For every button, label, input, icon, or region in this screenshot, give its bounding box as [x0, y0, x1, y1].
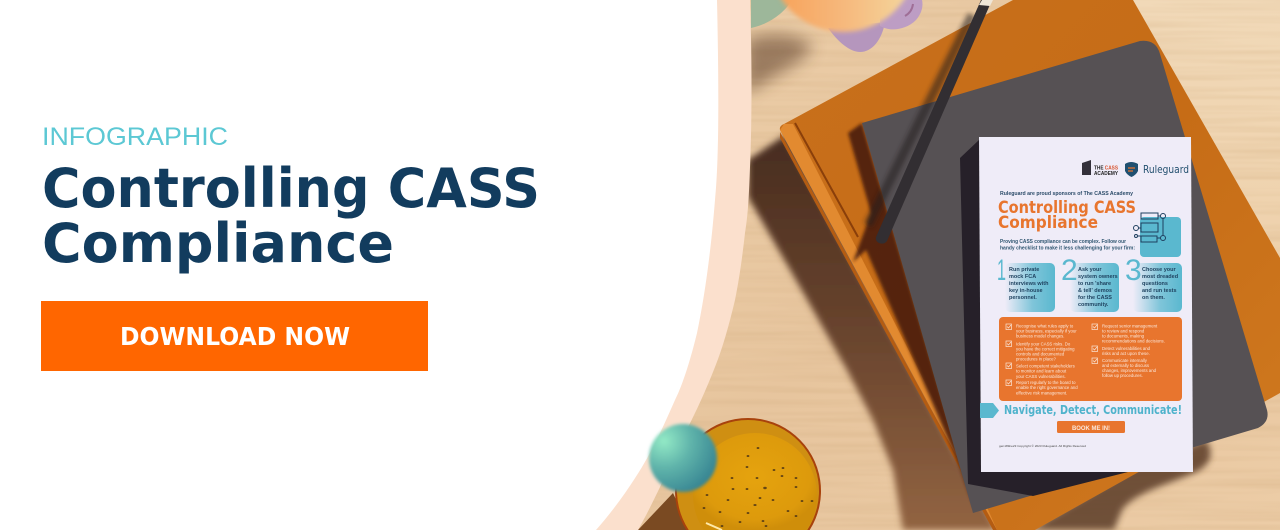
logo: Ruleguard	[1125, 162, 1189, 177]
sponsor line: Ruleguard are proud sponsors of The CASS Academy	[1000, 191, 1134, 197]
leaflet mockup	[979, 137, 1193, 472]
logo: The CASS Academy: THE CASS	[1094, 166, 1118, 172]
leaflet heading	[998, 198, 1136, 233]
checklist text: your CASS vulnerabilities.	[1016, 374, 1066, 379]
step 2	[1061, 254, 1119, 312]
intro text: Proving CASS compliance can be complex. Follow our	[1000, 239, 1126, 245]
icon: process diagram	[1134, 213, 1181, 257]
step 2: for the CASS	[1078, 295, 1112, 301]
photo: desk scene	[590, 0, 1280, 530]
checklist text: controls and documented	[1016, 352, 1065, 356]
pencil	[868, 0, 993, 244]
checklist text: procedures in place?	[1016, 356, 1057, 362]
step 3	[1125, 254, 1182, 312]
step 2: system owners	[1078, 274, 1118, 280]
leaflet heading: Compliance	[998, 213, 1098, 233]
step 1: interviews with	[1009, 281, 1049, 287]
intro text	[1000, 239, 1135, 252]
checklist text: your business, especially if your	[1016, 328, 1077, 334]
peach curved band	[0, 0, 752, 530]
step 3: questions	[1142, 281, 1168, 287]
step 1	[997, 254, 1055, 312]
step 1: 1	[997, 254, 1006, 287]
checklist text: recommendations and decisions.	[1102, 338, 1165, 344]
step 1: mock FCA	[1009, 274, 1036, 280]
eyebrow label: INFOGRAPHIC	[42, 123, 228, 151]
checklist text: enable the right governance and	[1016, 385, 1078, 390]
checklist text: to review and respond	[1102, 328, 1145, 334]
leaf	[751, 0, 792, 28]
checklist text: follow up procedures.	[1102, 373, 1143, 378]
step 2: Ask your	[1078, 267, 1102, 273]
step 2: 2	[1061, 254, 1078, 287]
checklist text: Detect vulnerabilities and	[1102, 346, 1151, 351]
checklist text: business model changes.	[1016, 334, 1064, 338]
book shadow under sheet	[960, 140, 1193, 496]
title	[42, 157, 540, 275]
checklist text: to documents, making	[1102, 334, 1145, 338]
checklist text: to monitor and learn about	[1016, 368, 1067, 374]
logo: The CASS Academy: ACADEMY	[1094, 171, 1118, 177]
logo: The CASS Academy	[1082, 160, 1118, 177]
step 2: community.	[1078, 302, 1109, 308]
step 3: on them.	[1142, 295, 1165, 301]
checklist text: Recognise what rules apply to	[1016, 324, 1074, 328]
checklist text: Identify your CASS risks. Do	[1016, 342, 1071, 346]
orange notebook	[780, 0, 1280, 530]
wooden table	[590, 0, 1280, 530]
slogan: Navigate, Detect, Communicate!	[1004, 402, 1182, 417]
checklist text: changes, improvements and	[1102, 368, 1157, 373]
checklist text: Report regularly to the board to	[1016, 380, 1076, 385]
checklist text: and externally to discuss	[1102, 363, 1149, 368]
step 3: most dreaded	[1142, 274, 1178, 280]
step 1: Run private	[1009, 267, 1039, 273]
flower petals	[828, 0, 922, 52]
checklist text: you have the correct mitigating	[1016, 346, 1075, 352]
grey notebook	[862, 41, 1268, 513]
step 1: personnel.	[1009, 295, 1037, 301]
leaflet button: BOOK ME IN!	[1072, 425, 1110, 432]
checklist text: Select competent stakeholders	[1016, 364, 1075, 368]
teal sphere	[649, 424, 717, 492]
white panel	[0, 0, 718, 530]
download button	[41, 301, 428, 371]
checklist text: effective risk management.	[1016, 390, 1067, 396]
checklist text	[1016, 324, 1165, 396]
table shadows	[638, 35, 1211, 530]
step 3: 3	[1125, 254, 1142, 287]
leaflet button	[1057, 421, 1125, 433]
logo: Ruleguard: Ruleguard	[1143, 164, 1189, 176]
checkboxes	[1006, 324, 1098, 386]
sheet	[979, 137, 1193, 472]
checklist text: Request senior management	[1102, 324, 1158, 328]
checklist panel	[999, 317, 1182, 401]
shadow of grey notebook	[848, 123, 975, 510]
title: Controlling CASS	[42, 157, 540, 220]
notebook spine	[780, 124, 997, 530]
arrow	[980, 403, 999, 418]
checklist text: risks and act upon these.	[1102, 351, 1150, 356]
leaflet heading: Controlling CASS	[998, 198, 1136, 218]
peach sphere	[769, 0, 917, 32]
title: Compliance	[42, 212, 394, 275]
step 2: & tell' demos	[1078, 288, 1112, 294]
leaflet footer: gen189ne23 Copyright © 2023 Ruleguard. All Rights Reserved	[999, 444, 1086, 448]
step 3: Choose your	[1142, 267, 1176, 273]
step 3: and run tests	[1142, 288, 1177, 294]
download button: DOWNLOAD NOW	[120, 322, 350, 351]
intro text: handy checklist to make it less challenging for your firm:	[1000, 246, 1135, 252]
seeds	[703, 447, 813, 527]
checklist text: Communicate internally	[1102, 358, 1148, 363]
step 1: key in-house	[1009, 288, 1043, 294]
step 2: to run 'share	[1078, 281, 1111, 287]
bowl of honey	[675, 418, 821, 530]
